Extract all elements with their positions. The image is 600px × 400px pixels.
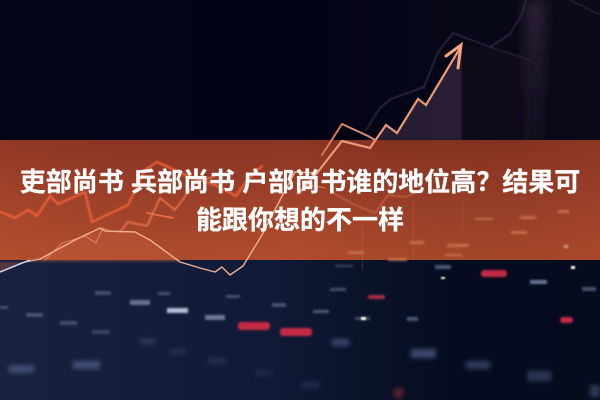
title: 能跟你想的不一样	[196, 205, 404, 235]
chart line: rising arrow	[300, 45, 461, 192]
data labels: small grey tickers	[0, 265, 596, 334]
data labels: red highlighted tickers	[238, 270, 573, 336]
chart line: pale curve crossing band and lower panel	[0, 172, 317, 275]
data labels: blurred foreground tickers	[9, 339, 600, 397]
chart lines inside band	[0, 162, 415, 260]
panel: orange title band	[0, 140, 600, 260]
vertical guide lines in band	[362, 200, 463, 270]
title	[20, 167, 580, 235]
panel: lower navy background	[0, 255, 600, 400]
area fill under pale curve in band	[0, 228, 190, 272]
area fill under rising chart line	[355, 0, 546, 148]
chart line: faint upper trend	[366, 0, 600, 140]
bright data dots	[361, 266, 575, 320]
title: 吏部尚书 兵部尚书 户部尚书谁的地位高？结果可	[20, 167, 580, 197]
pale curve, lower section	[0, 260, 30, 272]
data labels inside band	[348, 210, 569, 261]
blurred red foreground marker	[394, 388, 403, 398]
